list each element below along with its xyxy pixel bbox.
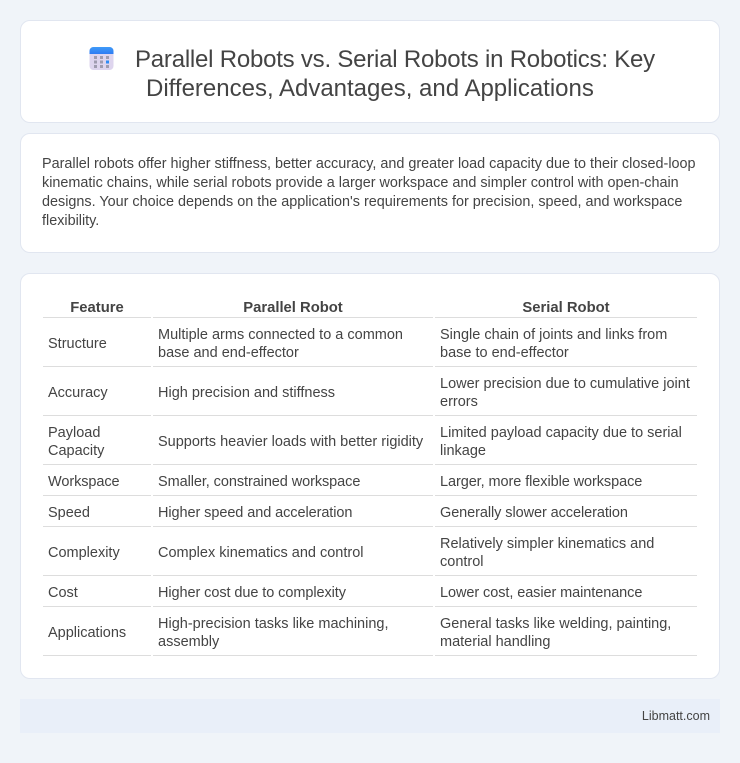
row: Applications: High-precision tasks like machining,	[158, 616, 388, 632]
row: Payload Capacity: Payload	[48, 425, 100, 441]
row: Workspace: Larger, more flexible workspace	[440, 474, 642, 490]
row: Payload Capacity	[48, 425, 682, 459]
row: Workspace: Workspace	[48, 474, 120, 490]
intro paragraph: Parallel robots offer higher stiffness, better accuracy, and greater load capacity due to their closed-loop	[42, 156, 696, 172]
title: Parallel Robots vs. Serial Robots in Robotics: Key	[135, 46, 655, 73]
row: Speed: Higher speed and acceleration	[158, 505, 352, 521]
intro paragraph	[42, 156, 696, 229]
row: Complexity: Complexity	[48, 545, 120, 561]
table header: Serial Robot	[522, 300, 610, 316]
row: Cost: Cost	[48, 585, 78, 601]
intro paragraph: designs. Your choice depends on the application's requirements for precision, speed, and workspace	[42, 194, 682, 210]
intro paragraph: kinematic chains, while serial robots provide a larger workspace and simpler control with open-chain	[42, 175, 679, 191]
row: Accuracy: Lower precision due to cumulative joint	[440, 376, 690, 392]
row: Structure	[48, 327, 667, 361]
row: Structure: base and end-effector	[158, 345, 299, 361]
panel: intro text	[20, 133, 720, 253]
row: Structure: Single chain of joints and links from	[440, 327, 667, 343]
row: Accuracy: Accuracy	[48, 385, 108, 401]
row: Workspace	[48, 474, 642, 490]
row: Payload Capacity: linkage	[440, 443, 486, 459]
title: Differences, Advantages, and Applications	[146, 75, 594, 102]
icon: calendar	[90, 47, 114, 70]
table header: Parallel Robot	[243, 300, 343, 316]
row: Applications	[48, 616, 671, 650]
row: Structure: base to end-effector	[440, 345, 569, 361]
row: Payload Capacity: Limited payload capacity due to serial	[440, 425, 682, 441]
row: Workspace: Smaller, constrained workspace	[158, 474, 360, 490]
row: Complexity: Complex kinematics and control	[158, 545, 364, 561]
footer credit: Libmatt.com	[642, 709, 710, 723]
row: Cost	[48, 585, 642, 601]
row: Complexity: Relatively simpler kinematics and	[440, 536, 654, 552]
row: Speed	[48, 505, 628, 521]
intro paragraph: flexibility.	[42, 213, 99, 229]
footer bar	[20, 699, 720, 733]
row: Structure: Multiple arms connected to a common	[158, 327, 403, 343]
row: Accuracy	[48, 376, 690, 410]
row: Applications: Applications	[48, 625, 126, 641]
row: Speed: Speed	[48, 505, 90, 521]
row: Cost: Lower cost, easier maintenance	[440, 585, 642, 601]
table header: Feature	[70, 300, 124, 316]
row: Complexity	[48, 536, 654, 570]
table header	[70, 300, 610, 316]
row: Structure: Structure	[48, 336, 107, 352]
row: Payload Capacity: Capacity	[48, 443, 104, 459]
row: Complexity: control	[440, 554, 484, 570]
row: Cost: Higher cost due to complexity	[158, 585, 346, 601]
row: Accuracy: errors	[440, 394, 478, 410]
row: Applications: assembly	[158, 634, 219, 650]
title	[135, 46, 655, 102]
row: Applications: material handling	[440, 634, 550, 650]
row: Payload Capacity: Supports heavier loads with better rigidity	[158, 434, 423, 450]
row: Speed: Generally slower acceleration	[440, 505, 628, 521]
panel: comparison table	[20, 273, 720, 679]
row: Accuracy: High precision and stiffness	[158, 385, 335, 401]
panel: title card	[20, 20, 720, 123]
row: Applications: General tasks like welding, painting,	[440, 616, 671, 632]
